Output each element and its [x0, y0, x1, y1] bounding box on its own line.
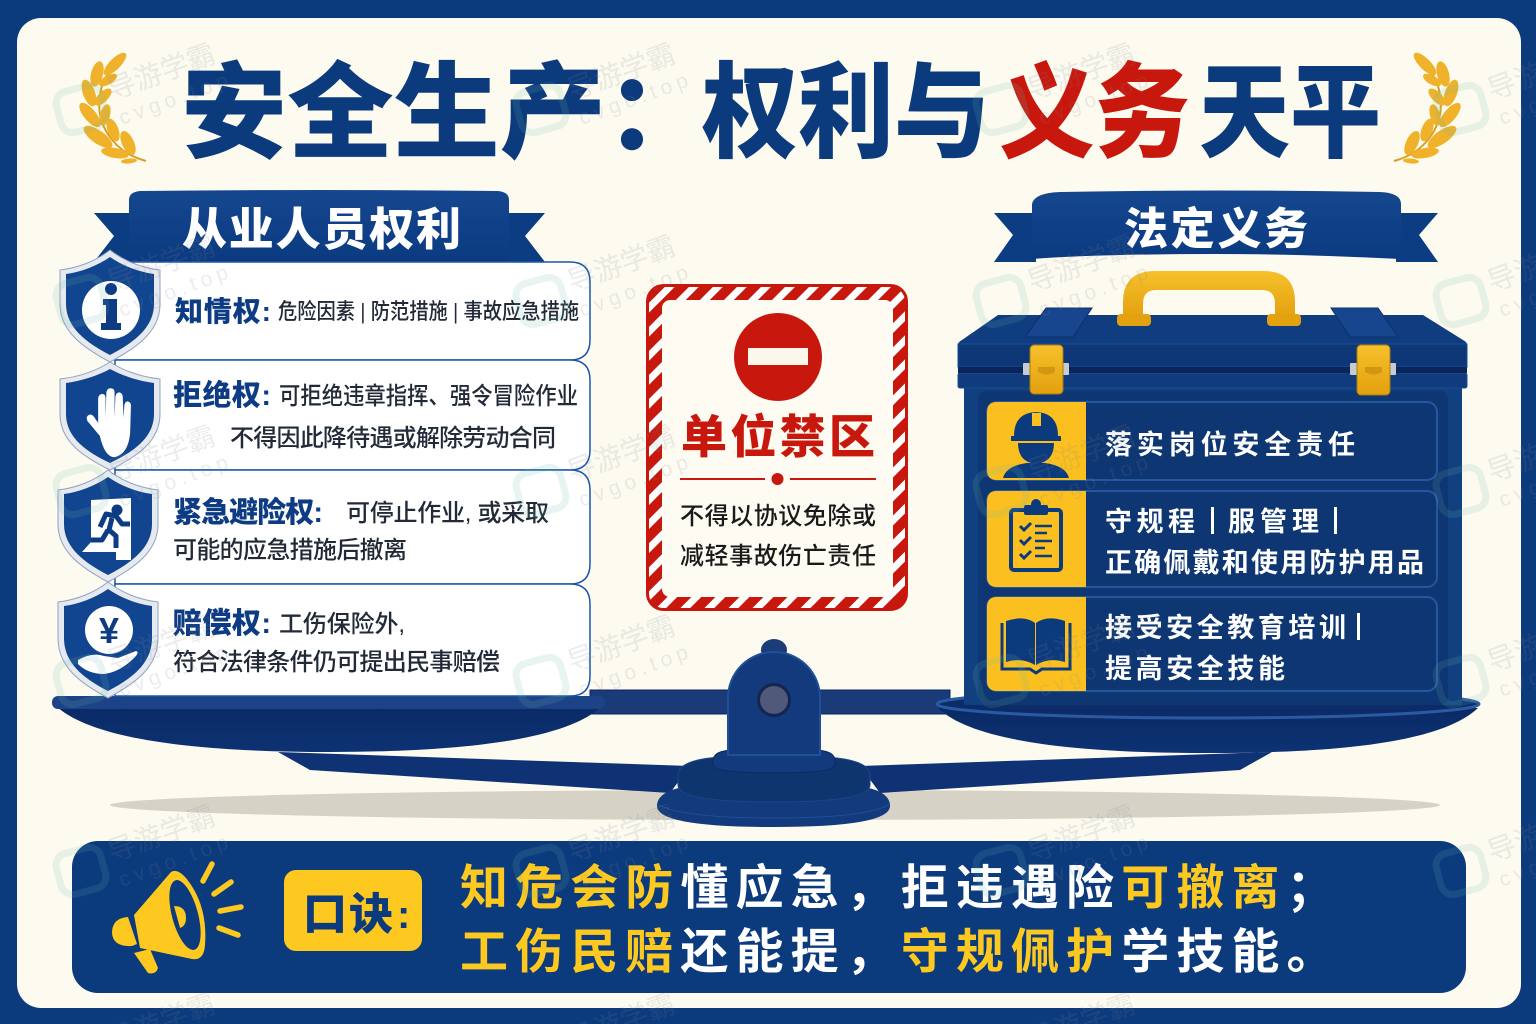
card: 紧急避险权	[115, 470, 590, 584]
card: 知情权	[115, 262, 590, 360]
left latch	[1023, 345, 1069, 394]
icon: no entry	[734, 313, 822, 401]
banner: rights ribbon	[94, 190, 545, 262]
row: 接受培训	[987, 597, 1437, 691]
sign text: 不得以协议免除或	[680, 503, 876, 530]
ribbon heading: 法定义务	[1124, 205, 1308, 254]
card: 赔偿权	[115, 584, 590, 696]
watermark pattern: cvgo.top	[116, 67, 236, 130]
card: 赔偿权: 符合法律条件仍可提出民事赔偿	[173, 649, 500, 676]
mnemonic banner	[72, 841, 1466, 993]
ribbon heading: 从业人员权利	[182, 204, 461, 255]
mnemonic label: :	[397, 893, 410, 937]
watermark pattern: 导游学霸	[1023, 230, 1139, 298]
mnemonic label: 口诀	[303, 890, 393, 939]
lid blocks	[1025, 308, 1398, 337]
title: 天平	[1199, 56, 1381, 172]
duty text line 2: 正确佩戴和使用防护用品	[1105, 548, 1424, 578]
watermark pattern: 导游学霸	[103, 610, 219, 678]
sign text	[680, 503, 876, 570]
duty text line 1: 接受安全教育培训	[1105, 613, 1346, 643]
rights cards panel	[58, 250, 590, 698]
laurel left	[76, 50, 146, 164]
watermark pattern: 导游学霸	[103, 38, 219, 106]
icon: book	[1002, 618, 1070, 673]
watermark pattern: cvgo.top	[1036, 449, 1156, 512]
title: 安全生产	[181, 56, 606, 172]
toolbox handle	[1123, 271, 1295, 318]
laurel right	[1394, 50, 1464, 164]
watermark pattern: cvgo.top	[116, 259, 236, 322]
card: 知情权: 知情权:	[175, 296, 271, 327]
watermark pattern: 导游学霸	[563, 800, 679, 868]
watermark pattern: 导游学霸	[563, 230, 679, 298]
right latch	[1350, 345, 1396, 395]
watermark pattern: cvgo.top	[1036, 829, 1156, 892]
card: 拒绝权: 可拒绝违章指挥、强令冒险作业	[279, 383, 578, 410]
title: ：	[606, 56, 710, 172]
card: 知情权: 危险因素 | 防范措施 | 事故应急措施	[278, 299, 579, 324]
scale base	[657, 750, 890, 827]
watermark pattern: 导游学霸	[103, 230, 219, 298]
watermark pattern: 导游学霸	[563, 610, 679, 678]
card: 紧急避险权: 可停止作业, 或采取	[346, 500, 549, 527]
title: 义务	[999, 56, 1190, 172]
sign divider	[680, 473, 876, 485]
pin	[757, 683, 791, 717]
icon: megaphone	[112, 864, 241, 973]
title	[181, 56, 1381, 172]
scale beam	[590, 690, 950, 714]
watermark pattern: 导游学霸	[1023, 800, 1139, 868]
watermark pattern: 导游学霸	[563, 38, 679, 106]
card: 紧急避险权: 紧急避险权:	[173, 495, 323, 529]
duty separator	[1357, 613, 1360, 640]
watermark pattern: cvgo.top	[576, 67, 696, 130]
toolbox inner panel	[978, 391, 1448, 705]
watermark pattern: cvgo.top	[576, 449, 696, 512]
right pan	[937, 690, 1479, 753]
card: 紧急避险权: 可能的应急措施后撤离	[173, 537, 407, 564]
title: 权利与	[702, 56, 990, 172]
duty text: 落实岗位安全责任	[1105, 429, 1355, 460]
row: 守规程	[987, 491, 1437, 587]
watermark pattern: cvgo.top	[576, 639, 696, 702]
mnemonic label	[284, 870, 422, 951]
card: 赔偿权: 赔偿权:	[173, 607, 271, 640]
mnemonic text line 2: 工伤民赔还能提，守规佩护学技能。	[460, 926, 1342, 979]
watermark pattern: cvgo.top	[1036, 67, 1156, 130]
card: 赔偿权: 工伤保险外,	[279, 611, 405, 638]
shield: exit	[58, 470, 158, 582]
watermark pattern: 导游学霸	[1023, 420, 1139, 488]
duty text separators and 服管理: 服管理	[1228, 507, 1319, 537]
icon: worker	[1003, 412, 1069, 478]
duty text line 1: 守规程	[1105, 507, 1195, 537]
shield: yen hand: ¥	[99, 610, 119, 651]
shield: info	[60, 250, 160, 362]
sign heading: 单位禁区	[681, 411, 875, 463]
banner: duties ribbon	[994, 190, 1438, 262]
card: 拒绝权	[115, 360, 590, 470]
duty text line 2: 提高安全技能	[1105, 654, 1285, 684]
toolbox body	[964, 380, 1462, 705]
toolbox lid	[958, 315, 1467, 367]
toolbox handle feet	[1117, 314, 1301, 326]
watermark pattern: 导游学霸	[103, 800, 219, 868]
shield: stop hand	[60, 362, 160, 470]
lid seam	[958, 367, 1467, 373]
prohibited zone sign	[648, 286, 906, 610]
watermark pattern: 导游学霸	[563, 420, 679, 488]
watermark pattern: 导游学霸	[103, 420, 219, 488]
watermark pattern: cvgo.top	[576, 259, 696, 322]
watermark pattern: cvgo.top	[1036, 639, 1156, 702]
card: 拒绝权: 拒绝权:	[173, 379, 271, 412]
watermark pattern: 导游学霸	[1023, 610, 1139, 678]
watermark pattern: cvgo.top	[116, 639, 236, 702]
watermark pattern: 导游学霸	[1023, 38, 1139, 106]
lid lower band	[958, 373, 1467, 388]
watermark pattern: cvgo.top	[1036, 259, 1156, 322]
card: 拒绝权: 不得因此降待遇或解除劳动合同	[230, 425, 556, 452]
scale shadow	[110, 790, 1440, 820]
toolbox	[958, 271, 1467, 705]
icon: clipboard	[1011, 499, 1061, 570]
scale pivot	[728, 639, 820, 755]
row: 岗位责任	[987, 402, 1437, 480]
left pan	[52, 696, 605, 752]
shield: yen hand	[58, 582, 158, 698]
sign text: 减轻事故伤亡责任	[680, 543, 876, 570]
watermark pattern: cvgo.top	[116, 829, 236, 892]
mnemonic text line 1: 知危会防懂应急，拒违遇险可撤离；	[460, 862, 1342, 915]
watermark pattern: cvgo.top	[576, 829, 696, 892]
lid front face	[958, 344, 1467, 367]
scale support arms	[278, 752, 1272, 793]
watermark pattern: cvgo.top	[116, 449, 236, 512]
